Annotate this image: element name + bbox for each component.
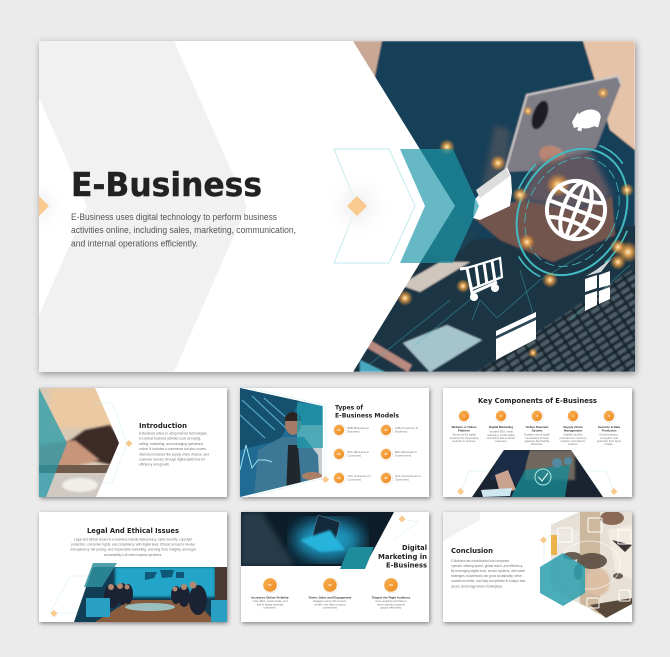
item: G2C: 06 <box>384 476 388 480</box>
item 4: supply chain: logistics, and delivery <box>561 439 586 443</box>
item 5: security: encryption, and <box>600 436 618 440</box>
item 5: security: Security & Data <box>598 425 620 429</box>
teal parallelogram <box>84 563 117 587</box>
heading: Key Components of E-Business <box>478 397 597 405</box>
item 1: website: Platform <box>458 428 470 432</box>
diamonds <box>457 488 618 495</box>
body text: selling, marketing, and managing operations <box>139 442 203 446</box>
teal hexagon <box>540 553 585 606</box>
heading <box>378 544 427 570</box>
teal overlay <box>39 388 67 497</box>
item 2: digital marketing: 2 <box>500 414 502 418</box>
hero photo: hand holding phone over keyboard <box>353 41 657 372</box>
photo: world map over room and woman <box>551 511 633 620</box>
item 2: digital marketing: customers. <box>495 439 508 443</box>
item: G2C <box>381 472 421 484</box>
grey corner shape <box>443 512 480 541</box>
outline chevron <box>93 403 127 483</box>
heading: Marketing in <box>378 553 427 561</box>
outline frame <box>50 576 95 613</box>
item 5: security: threats. <box>605 442 614 446</box>
item 03: Uses analytics and data to <box>375 599 407 603</box>
icon: wallet and cash <box>473 167 512 220</box>
icon: credit card <box>496 312 536 360</box>
body text: E-Business refers to using internet technologies <box>139 432 207 436</box>
glow lights <box>397 87 639 358</box>
item: C2C: 03 <box>337 476 341 480</box>
panel: key components slide <box>443 388 632 498</box>
item: G2C: G2C (Government to <box>395 474 421 478</box>
icon: globe <box>539 173 613 247</box>
title: E-Business <box>71 165 262 204</box>
item 4: supply chain: systems. <box>568 442 578 446</box>
item 5: security: Ensures privacy, <box>600 432 619 436</box>
item 4: supply chain: Supply Chain <box>563 425 583 429</box>
item: B2B <box>334 424 369 436</box>
body text: efficiency and growth. <box>139 462 170 466</box>
item 2: digital marketing: marketing, social media, <box>487 433 515 437</box>
item 03 <box>372 578 411 610</box>
item 2: digital marketing: and online ads to attract <box>487 436 515 440</box>
item 4: supply chain <box>559 410 587 446</box>
item 01: ads to attract potential <box>257 602 284 606</box>
photo: man with holographic charts <box>240 388 324 498</box>
item 2: digital marketing <box>487 410 515 443</box>
panel: main title slide <box>11 41 657 372</box>
body text: operate, offering speed, global reach, and efficiency. <box>451 564 523 568</box>
item 01: customers. <box>263 606 277 610</box>
item 02: Drives Sales and Engagement <box>309 596 351 600</box>
outline frame <box>240 386 325 499</box>
body text: online. It includes e-commerce but also covers <box>139 447 206 451</box>
body text: protection, consumer rights, and compliance with digital laws. Ethical concerns involve <box>71 542 195 546</box>
item: B2B: Business) <box>348 430 360 434</box>
item: C2B: 04 <box>384 428 388 432</box>
item: B2G: B2G (Business to <box>395 450 417 454</box>
item 02: conversions. <box>322 606 338 610</box>
photo: dark laptop in blue light <box>241 512 396 567</box>
item 4: supply chain: Management <box>564 428 582 432</box>
heading <box>335 404 399 420</box>
photo: hand touching tablet <box>470 450 605 498</box>
item 03: groups effectively. <box>380 606 402 610</box>
item 5: security: Protection <box>602 428 617 432</box>
item 3: online payment <box>524 410 550 446</box>
item 02: emails, and offers to boost <box>314 602 346 606</box>
body text: transparency, fair pricing, and responsible marketing, ensuring trust, integrity, and legal <box>70 548 196 552</box>
diamond <box>126 440 132 447</box>
item 3: online payment: Razorpay. <box>531 442 543 446</box>
item 4: supply chain: Digitally handles <box>564 432 583 436</box>
body text <box>139 432 209 466</box>
outline frames <box>461 471 614 491</box>
heading: Types of <box>335 404 363 412</box>
item 1: website <box>450 410 479 443</box>
item 3: online payment: Enables secure digital <box>524 432 550 436</box>
item 4: supply chain: procurement, inventory, <box>559 436 587 440</box>
heading: Digital <box>402 544 427 552</box>
body text: customers better, and stay competitive in today's fast- <box>451 579 526 583</box>
body text: customer service through digital platforms for <box>139 458 206 462</box>
teal parallelogram <box>340 547 374 569</box>
outline hexagon <box>544 520 600 575</box>
item 3: online payment: 3 <box>536 414 538 418</box>
item 1: website: Serves as the digital <box>452 432 476 436</box>
centre diamond <box>321 170 393 242</box>
item 03: Targets the Right Audience <box>372 596 411 600</box>
heading: Introduction <box>139 422 187 430</box>
item 5: security <box>597 410 621 446</box>
body text: accountability in all online business operations. <box>104 553 162 557</box>
teal chevron <box>400 149 479 263</box>
body text <box>451 559 526 588</box>
item 02: 02 <box>328 583 332 587</box>
item 01 <box>251 578 289 610</box>
panel: conclusion slide <box>443 511 633 622</box>
photo: boardroom with data screens <box>72 567 228 623</box>
panel: types of e-business models slide <box>240 386 429 499</box>
body text: strategies, businesses can grow sustainably, serve <box>451 574 522 578</box>
item 2: digital marketing: Includes SEO, email <box>489 430 513 434</box>
body text: to conduct business activities such as buying, <box>139 436 201 440</box>
item 1: website: products or services. <box>452 439 476 443</box>
diamond <box>322 476 329 483</box>
heading: E-Business <box>386 562 427 570</box>
decorative grey chevron <box>39 41 247 372</box>
item 3: online payment: gateways like PayPal, <box>524 439 550 443</box>
diamond <box>540 536 547 544</box>
item: C2B: Business) <box>395 430 407 434</box>
body text: paced, technology-driven marketplace. <box>451 584 503 588</box>
item: B2B: 01 <box>337 428 341 432</box>
teal hud rings <box>360 144 630 372</box>
outline frame <box>394 519 418 540</box>
hand <box>473 196 615 262</box>
outline chevron <box>334 149 415 263</box>
subtitle text block: and internal operations efficiently. <box>71 238 198 248</box>
item: B2G: Government) <box>395 454 411 458</box>
item: G2C: Consumer) <box>395 478 409 482</box>
item: C2C <box>334 472 371 484</box>
item 02 <box>309 578 351 610</box>
item 02: Engages users with content, <box>313 599 347 603</box>
item: B2C: 02 <box>337 452 341 456</box>
subtitle text block: E-Business uses digital technology to perform business <box>71 212 277 222</box>
subtitle text block <box>71 212 296 248</box>
item 1: website: storefront for showcasing <box>450 436 479 440</box>
item 3: online payment: transactions through <box>525 436 549 440</box>
body text: By leveraging digital tools, secure systems, and smart <box>451 569 525 573</box>
heading: E-Business Models <box>335 412 399 420</box>
item 1: website: 1 <box>463 414 465 418</box>
item 03: 03 <box>389 583 393 587</box>
body text: E-Business has revolutionized how companies <box>451 559 509 563</box>
item 1: website: Website or Online <box>452 425 477 429</box>
item: B2C <box>334 448 370 460</box>
teal overlay <box>297 402 323 448</box>
body text <box>70 538 196 557</box>
item: C2B: C2B (Consumer to <box>395 426 419 430</box>
body text: internal processes like supply chain, finance, and <box>139 452 209 456</box>
diamond <box>398 516 406 522</box>
item 2: digital marketing: Digital Marketing <box>489 425 513 429</box>
item: B2G: 05 <box>384 452 388 456</box>
item 01: Uses SEO, social media, and <box>253 599 288 603</box>
panel: digital marketing slide <box>241 512 429 622</box>
item: B2B: B2B (Business to <box>348 426 369 430</box>
left halo diamond <box>39 196 49 216</box>
panel: introduction slide <box>39 388 227 497</box>
item: B2C: B2C (Business to <box>348 450 370 454</box>
heading: Conclusion <box>451 547 493 555</box>
item 4: supply chain: 4 <box>572 414 574 418</box>
heading: Legal And Ethical Issues <box>87 527 179 535</box>
item 03: reach specific customer <box>377 602 405 606</box>
item 5: security: 5 <box>608 414 610 418</box>
item 5: security: protection from cyber <box>597 439 621 443</box>
item 3: online payment: System <box>532 428 543 432</box>
body text: Legal and ethical issues in e-business include data privacy, cyber security, copyright <box>74 538 192 542</box>
photo: hands on laptop <box>39 388 125 497</box>
panel: legal and ethical issues slide <box>39 512 228 623</box>
subtitle text block: activities online, including sales, marketing, communication, <box>71 225 296 235</box>
phone <box>505 76 621 172</box>
item: B2C: Consumer) <box>348 454 361 458</box>
icon: piggy bank <box>572 106 603 132</box>
item: C2B <box>381 424 419 436</box>
item 01: 01 <box>268 583 272 587</box>
icon: gift box <box>585 258 612 311</box>
item 01: Increases Online Visibility <box>251 596 289 600</box>
diamond <box>50 610 58 617</box>
item: C2C: Consumer) <box>348 478 361 482</box>
icon: shopping cart <box>460 258 502 300</box>
item: B2G <box>381 448 417 460</box>
item: C2C: C2C (Consumer to <box>348 474 371 478</box>
item 3: online payment: Online Payment <box>526 425 548 429</box>
